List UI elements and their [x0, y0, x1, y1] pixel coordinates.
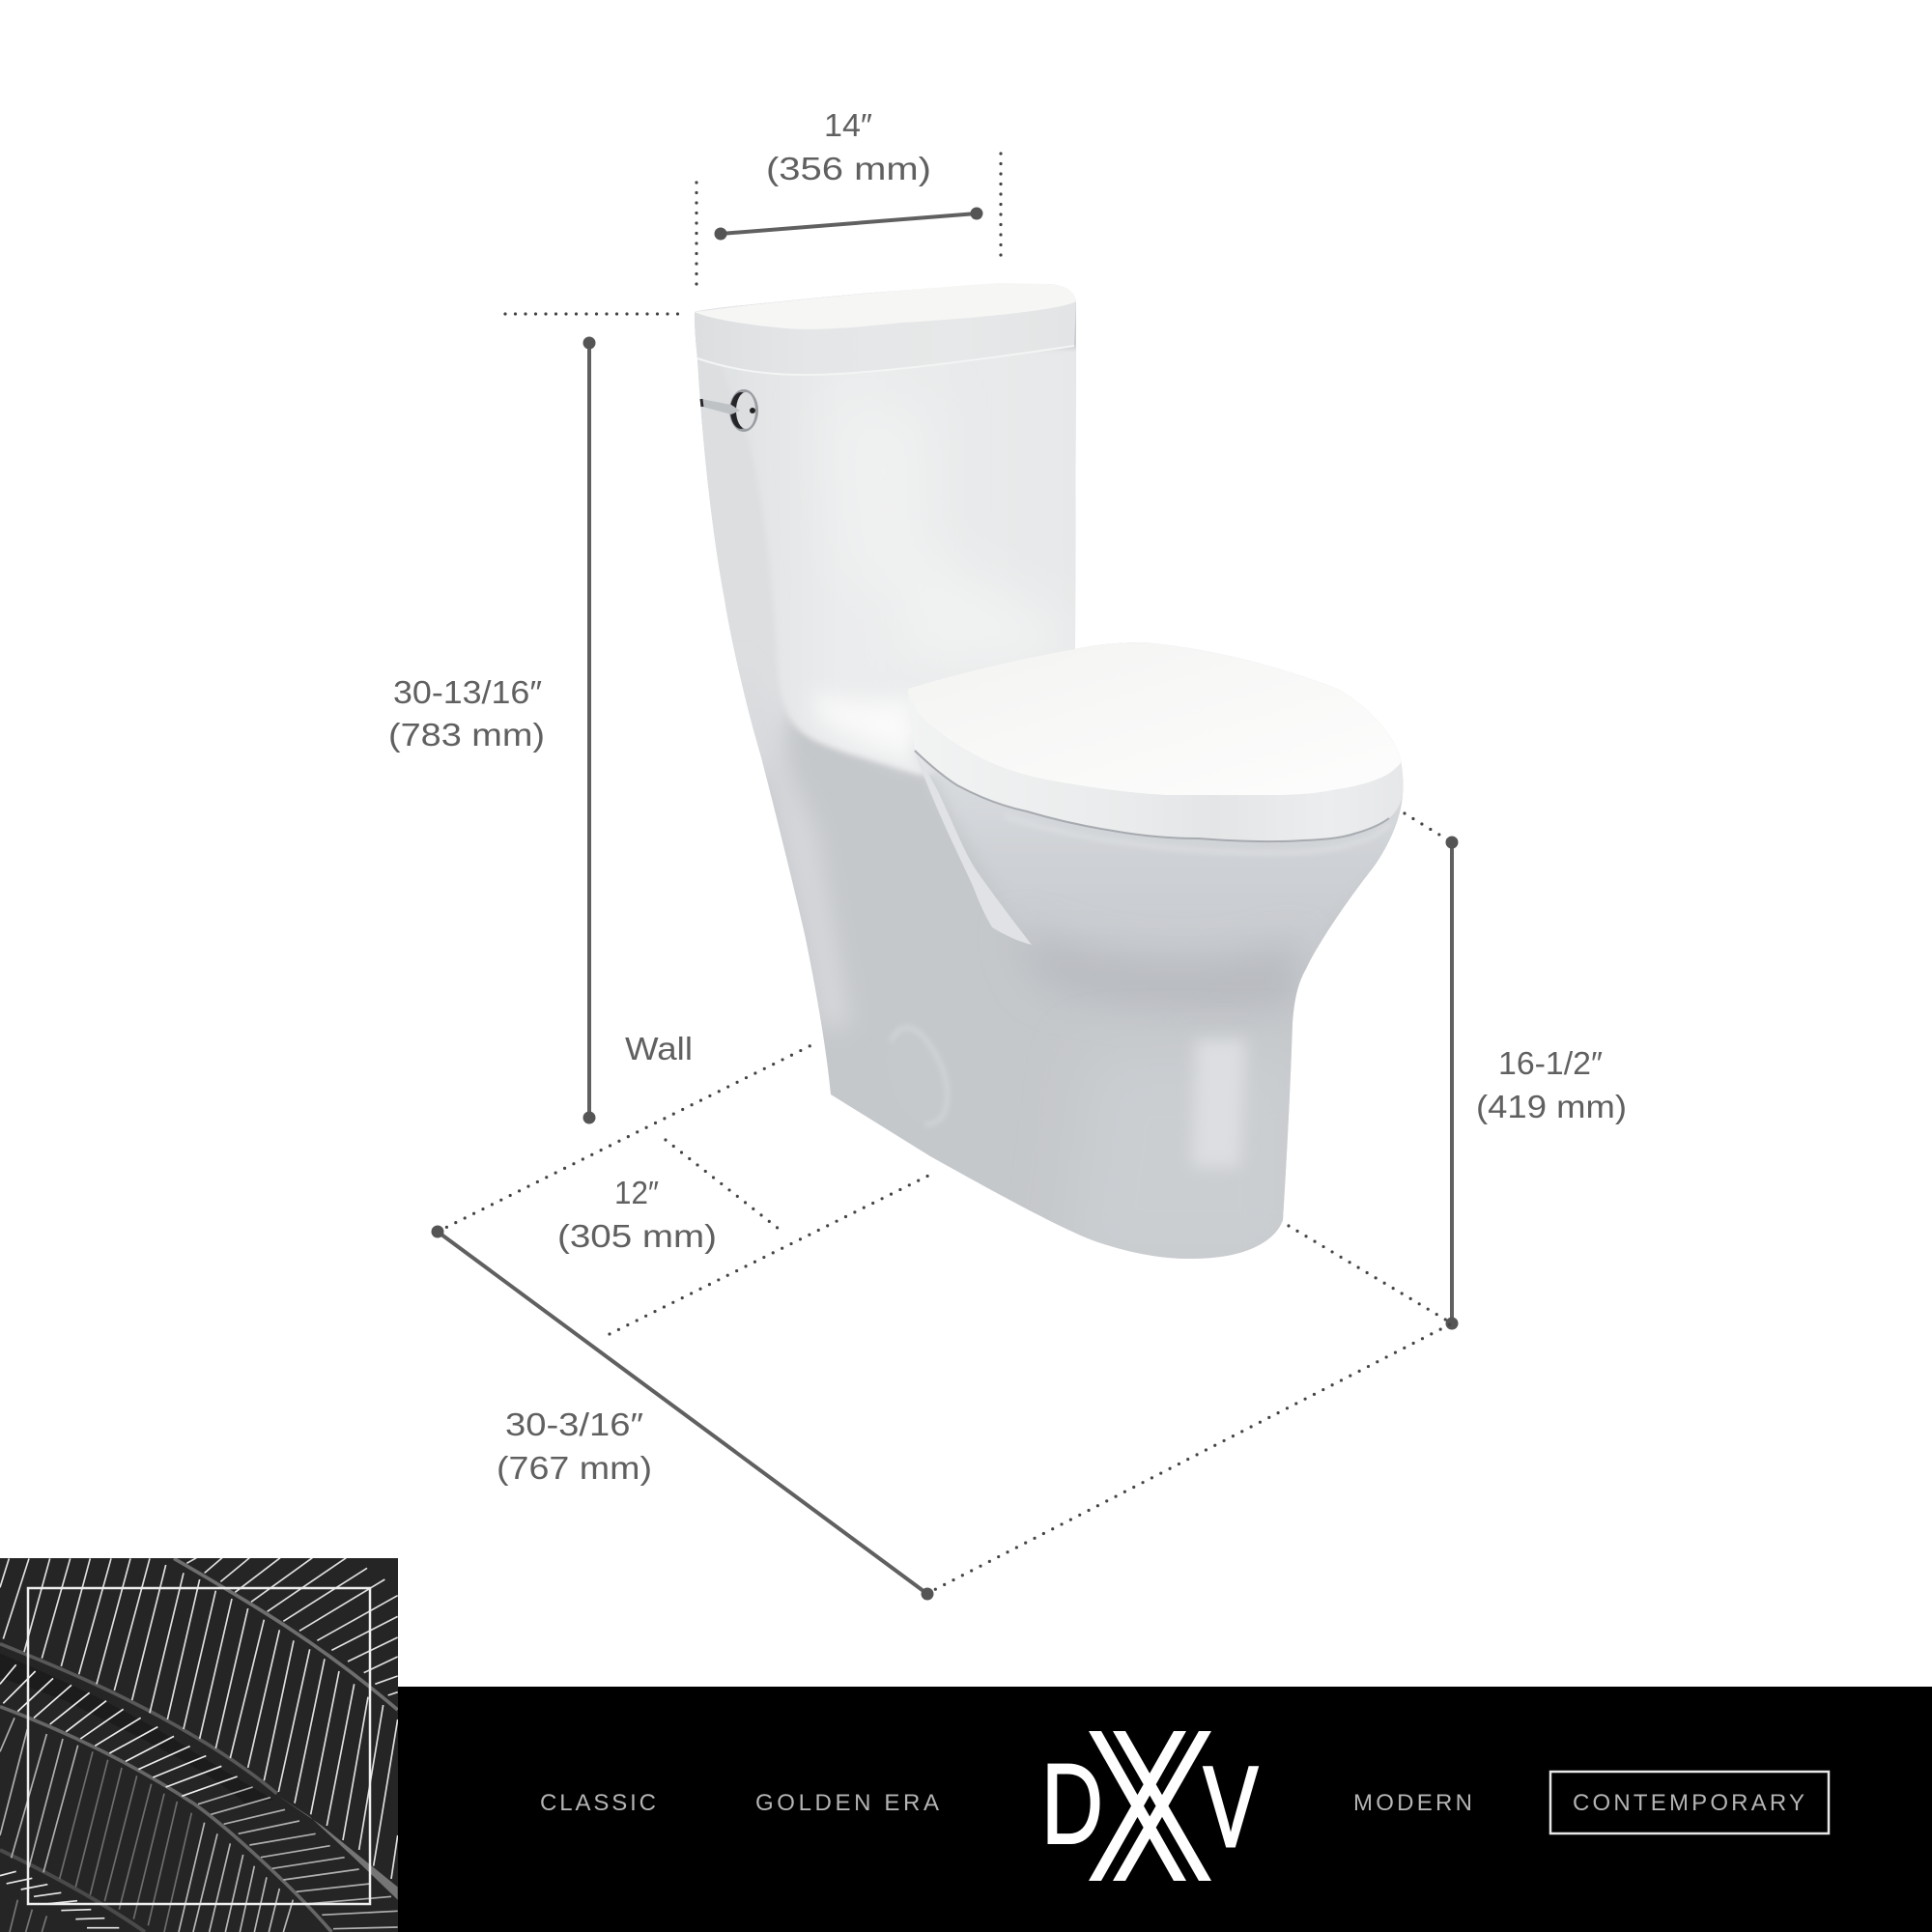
tank lid: [695, 284, 1076, 375]
dimension: tank width 14 in: [696, 107, 1001, 292]
nav: classic: CLASSIC: [540, 1790, 656, 1816]
bowl shadow: [1037, 943, 1293, 1003]
dimension: overall depth: 30-3/16″: [505, 1406, 643, 1442]
logo: DXV: [1041, 1731, 1258, 1881]
bowl: [920, 757, 1403, 998]
dimension: overall height: (783 mm): [388, 717, 545, 753]
nav: contemporary highlighted: [1550, 1772, 1829, 1833]
deck highlight: [821, 700, 913, 753]
bowl flange highlight: [1005, 816, 1391, 853]
dimension: overall height: 30-13/16″: [393, 674, 542, 710]
dimension: overall depth: [431, 1225, 1452, 1600]
left edge sheen: [771, 773, 846, 1022]
toilet seat rim: [908, 689, 1403, 841]
photo panel: architectural ribs: [0, 1558, 398, 1932]
product image: one-piece toilet: [676, 270, 1420, 1275]
dimension: overall height: [388, 314, 678, 1124]
side strap: [915, 752, 1032, 945]
dimension: tank width 14 in: 14″: [824, 107, 872, 143]
label: wall: Wall: [625, 1031, 693, 1066]
middle rib family: [0, 1664, 238, 1796]
pedestal sheen: [1091, 1111, 1289, 1259]
flush lever: [701, 389, 758, 432]
dimension: seat height: 16-1/2″: [1498, 1045, 1603, 1081]
upper rib family: [0, 1558, 398, 1879]
beams: [0, 1558, 398, 1932]
inner frame: [28, 1588, 370, 1904]
tank left side shading: [697, 359, 790, 761]
dimension: seat height: [1289, 813, 1627, 1329]
dimension: overall depth: (767 mm): [497, 1450, 652, 1486]
bottom left rib family: [0, 1871, 119, 1928]
nav: modern: MODERN: [1353, 1790, 1472, 1816]
dimension: rough-in 12 in: [438, 1042, 930, 1334]
seat lid top: [908, 642, 1401, 795]
top right rib family: [186, 1558, 398, 1695]
footer band: [398, 1687, 1932, 1932]
dimension: tank width 14 in: (356 mm): [766, 151, 931, 186]
nav: contemporary highlighted: CONTEMPORARY: [1573, 1790, 1804, 1816]
logo: DXV: D: [1041, 1741, 1103, 1868]
trap cover: [875, 1020, 960, 1132]
tank lid top surface: [695, 283, 1076, 329]
logo: DXV: V: [1204, 1744, 1258, 1871]
tank lid seam: [697, 346, 1074, 375]
seat underside line: [915, 751, 1389, 841]
dimension: rough-in 12 in: 12″: [614, 1175, 659, 1210]
dimension: rough-in 12 in: (305 mm): [557, 1218, 717, 1254]
pedestal highlight: [1192, 1039, 1246, 1167]
lower rib family: [0, 1718, 78, 1872]
dimension: seat height: (419 mm): [1476, 1089, 1627, 1124]
nav: golden era: GOLDEN ERA: [755, 1790, 939, 1816]
tank body: [775, 346, 1076, 777]
tank highlights: [956, 611, 1009, 629]
